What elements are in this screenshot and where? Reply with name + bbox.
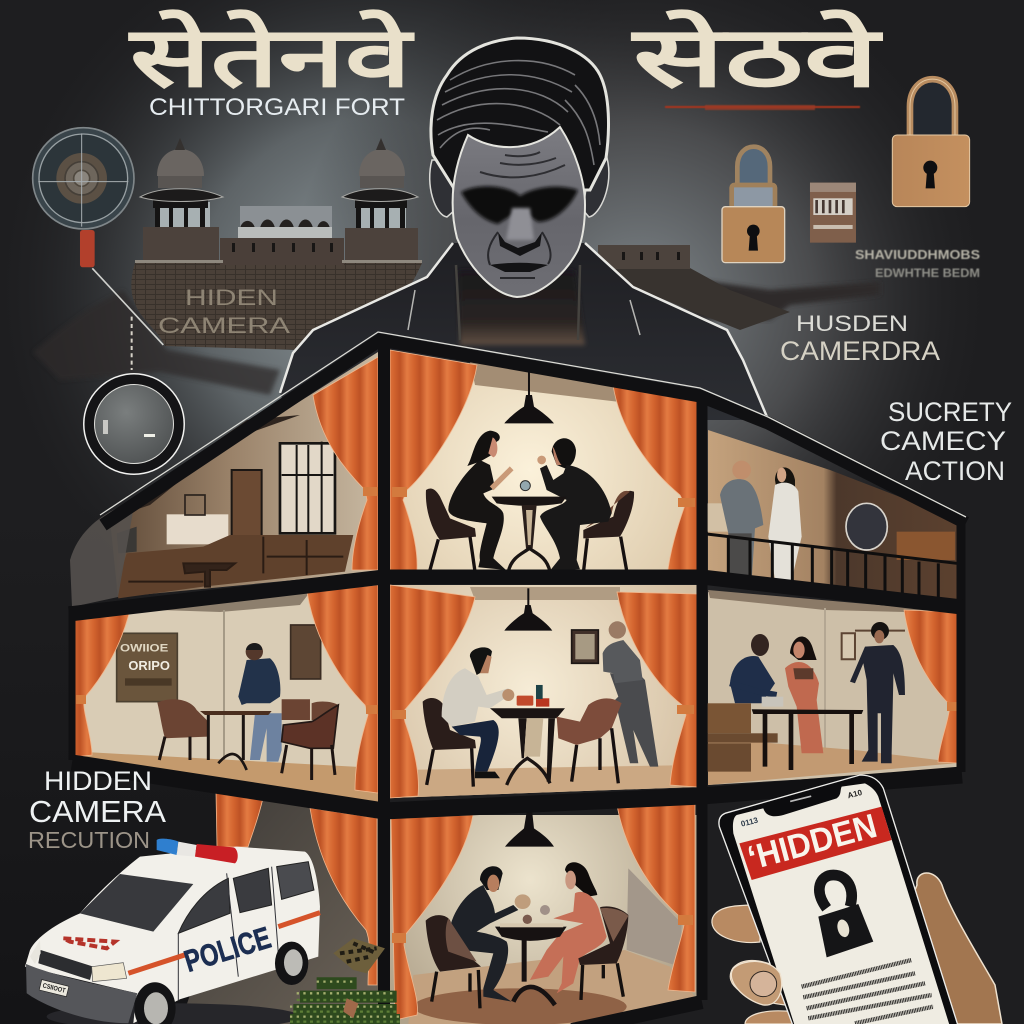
man in blue jacket (238, 643, 282, 762)
floor (408, 950, 695, 1024)
furniture (117, 535, 353, 598)
window (280, 442, 335, 533)
table with food (495, 905, 567, 1005)
curtains (75, 350, 957, 1020)
fort upper wall (220, 238, 344, 265)
finger 1 (712, 905, 760, 943)
text lines (802, 960, 933, 1023)
room: bottom centre (390, 815, 697, 1024)
table: top room (492, 481, 567, 572)
icon: lens with concentric rings (33, 128, 163, 370)
top and middle floor figures, centre rooms (423, 372, 658, 787)
text block: hidden camera recution: HIDDEN (44, 766, 152, 796)
sofa behind (282, 699, 338, 720)
windshield (80, 874, 193, 932)
sign board: ORIPO (128, 658, 170, 673)
text block: sucrety camecy action: CAMECY (880, 426, 1006, 456)
curtain tiebacks (76, 487, 957, 943)
fort central arches (238, 206, 332, 238)
right fort wall and hillside (598, 245, 880, 330)
grille (38, 950, 93, 980)
subtitle: Chittorgarh fort: CHITTORGARI FORT (149, 94, 405, 121)
brow and eye shadows (461, 186, 578, 224)
curtain bottom 2 (391, 815, 473, 1020)
building frame: roof, floors and pillars (69, 337, 966, 1024)
table: mid room (490, 685, 565, 785)
building: back area of bottom floor (180, 790, 378, 1024)
text block: husden camerdra: HUSDEN (796, 311, 908, 336)
face (453, 127, 585, 297)
chest (458, 270, 585, 345)
licence plate: CSIIOOT (42, 982, 66, 995)
text block: sucrety camecy action (880, 397, 1012, 486)
curtain top 2 (390, 350, 477, 570)
red smeared subtitle (665, 105, 860, 110)
right chair (578, 906, 628, 1000)
van body (25, 847, 320, 1023)
icon: large padlock (892, 79, 970, 207)
garbled caption (855, 247, 980, 280)
fort illustration (33, 138, 422, 395)
icon: small padlock (722, 147, 785, 263)
curtain bottom 1 (310, 808, 377, 985)
left ear (430, 160, 455, 217)
air conditioner (167, 514, 228, 544)
woman: top room (448, 431, 512, 570)
curtain top 1 (313, 357, 378, 570)
finger 2 (730, 961, 790, 1005)
fort right tower (342, 138, 422, 263)
door lines (178, 867, 278, 1000)
sign board: OWIIOE (120, 643, 169, 655)
forehead lines (480, 152, 565, 177)
roof highlights (100, 332, 966, 517)
rear wheel (275, 942, 308, 985)
man: mid room (442, 647, 514, 778)
banner label: ‘HIDDEN (744, 807, 881, 878)
text block: sucrety camecy action: ACTION (905, 456, 1005, 486)
woman seated (530, 862, 607, 993)
nose highlight (506, 208, 534, 240)
table (200, 711, 272, 770)
right ear (583, 158, 609, 217)
room: top right (707, 430, 965, 600)
front finger on phone (731, 961, 782, 1005)
hair strands (437, 61, 600, 165)
phone screen (733, 783, 950, 1024)
fort lower walls (131, 263, 422, 350)
lamp: top room (504, 372, 554, 423)
woman at table (785, 637, 823, 753)
man bending (730, 634, 777, 703)
fort left tower (135, 138, 223, 263)
police light bar (157, 839, 238, 863)
lamp: bottom room (505, 810, 554, 847)
van bumper (26, 964, 137, 1023)
curtain far left (75, 610, 130, 757)
police van (25, 839, 400, 1024)
status text: 0113 (740, 816, 759, 829)
lock icon (818, 875, 873, 957)
curtain middle 2 (390, 585, 475, 798)
left machine (708, 503, 728, 532)
plant: green bushes (290, 982, 400, 1022)
red banner (739, 807, 892, 880)
round sign (846, 503, 887, 550)
room: top left (70, 352, 378, 607)
plant: camo leaves (333, 938, 385, 973)
finger 3 (745, 1011, 795, 1024)
curtain middle 1 (307, 585, 378, 793)
smartphone (719, 775, 958, 1024)
headlight (92, 963, 127, 982)
thumb (915, 873, 1002, 1024)
smartphone: A10 (847, 788, 864, 800)
picture frame (185, 495, 205, 515)
wall picture (291, 625, 321, 679)
speaker (790, 795, 811, 802)
curtain middle 3 (617, 592, 697, 787)
wall frame (842, 631, 905, 659)
left armchair (157, 699, 208, 760)
room: top centre (390, 352, 697, 578)
man: dark suit bust (280, 38, 770, 420)
icon: building thumbnail (810, 183, 856, 243)
woman in white figure (768, 467, 802, 580)
side windows (178, 862, 314, 933)
sign board (117, 633, 177, 702)
title: left Devanagari word: सेतेनवे (127, 9, 416, 104)
hood mark (63, 938, 115, 948)
man: top room (537, 438, 612, 571)
left chair: top room (426, 488, 476, 572)
room: middle centre (390, 585, 697, 798)
curtain bottom 3 (617, 800, 695, 992)
fort hill, left (33, 290, 280, 395)
garbled caption: EDWHTHE BEDM (875, 266, 980, 280)
text block: hidden camera recution: CAMERA (29, 794, 166, 829)
picture: mid room (572, 630, 598, 663)
man seated (448, 866, 531, 1002)
hair (431, 38, 608, 190)
garbled caption: SHAVIUDDHMOBS (855, 247, 980, 262)
licence plate (39, 980, 69, 997)
right armchair (282, 705, 338, 780)
table (752, 697, 863, 770)
left fingers behind phone (712, 905, 795, 1024)
text block: hidden camera recution (28, 766, 166, 853)
right chair: mid room (557, 698, 622, 783)
curtain far right (904, 610, 957, 763)
text block: hidden camera recution: RECUTION (28, 827, 150, 853)
left chair: mid room (423, 698, 476, 787)
door (232, 470, 262, 540)
right chair: top room (583, 491, 634, 574)
bench (708, 703, 778, 772)
text block: husden camerdra (780, 311, 940, 366)
text block: husden camerdra: CAMERDRA (780, 336, 940, 366)
old man figure (720, 461, 763, 580)
phone body (719, 775, 958, 1024)
left chair (426, 915, 481, 1008)
title: right Devanagari word: सेठवे (630, 9, 884, 104)
lamp: middle room (504, 588, 552, 631)
front wheel (134, 982, 176, 1024)
standing man (850, 622, 905, 763)
cabinet (897, 532, 955, 560)
van shadow (47, 1003, 300, 1024)
balcony railing (707, 534, 957, 600)
icon: magnifying glass (83, 373, 185, 475)
curtain top 3 (613, 385, 697, 577)
curtain bottom far left (216, 792, 263, 847)
fort label: hidden: HIDEN (185, 285, 278, 310)
nose and mouth shadows (490, 232, 548, 272)
fort label: camera: CAMERA (158, 313, 290, 338)
room: middle left (75, 585, 378, 802)
room: middle right (708, 590, 958, 785)
stripe (128, 913, 320, 973)
text block: sucrety camecy action: SUCRETY (888, 397, 1012, 427)
standing man: middle room (603, 621, 658, 767)
police label: POLICE (180, 921, 275, 979)
